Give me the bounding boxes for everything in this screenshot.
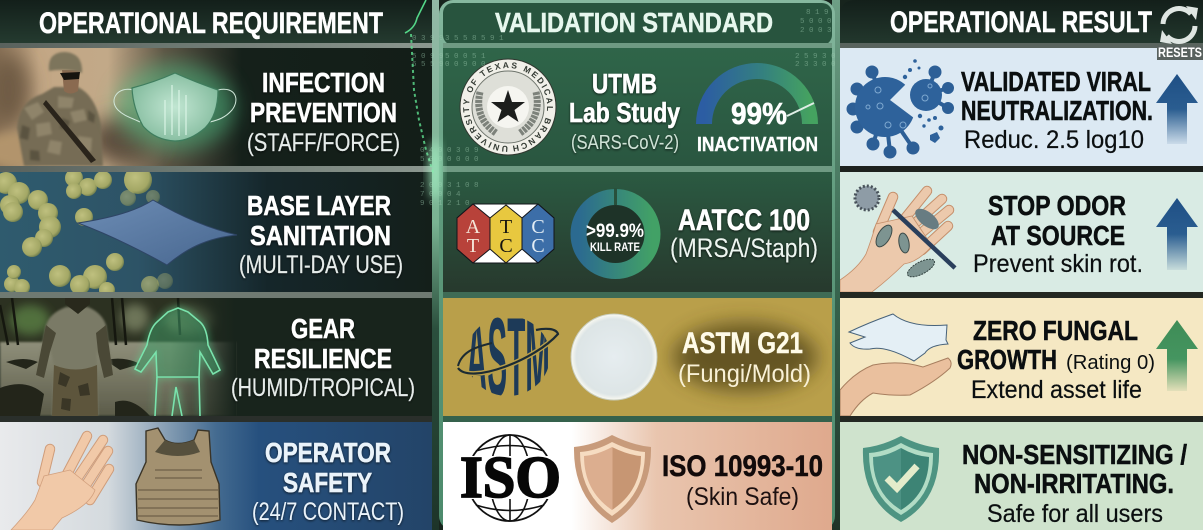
label: gear resilience: GEAR: [291, 313, 355, 344]
row: AATCC 100: [457, 188, 818, 271]
digital data streams: 2 5 9 3 0 0: [795, 53, 845, 61]
label: infection prevention: INFECTION: [262, 67, 385, 98]
row: ASTM G21: ASTM: [466, 295, 550, 420]
label: operator safety: OPERATOR: [265, 437, 391, 468]
icon: AATCC logo: C: [499, 235, 513, 257]
digital data streams: 3 5 5 8 5 9 1: [445, 35, 504, 43]
icon: plate carrier vest: [136, 428, 220, 525]
label: UTMB lab study: Lab Study: [569, 97, 680, 128]
icon: AATCC logo: T: [467, 235, 479, 257]
chart: kill rate donut: >99.9%: [586, 221, 644, 242]
label: AATCC 100: (MRSA/Staph): [670, 233, 818, 263]
icon: UTMB seal: UNIVERSITY OF TEXAS MEDICAL BRANCH: [463, 62, 553, 152]
icon: AATCC logo: C: [531, 235, 545, 257]
label: base layer sanitation: SANITATION: [250, 220, 391, 251]
row: viral neutralization: [840, 45, 1203, 166]
label: zero fungal growth: [957, 315, 1155, 404]
column: operational result: [840, 0, 1203, 530]
row: ISO 10993-10: [443, 422, 832, 530]
label: operator safety: SAFETY: [283, 467, 372, 498]
icon: AATCC logo: C: [531, 216, 545, 238]
label: stop odor at source: [973, 190, 1143, 278]
label: validated viral neutralization: [961, 66, 1153, 154]
photo: soldier in dust: [0, 52, 161, 168]
label: non-sensitizing non-irritating: [962, 439, 1187, 528]
label: stop odor at source: AT SOURCE: [991, 220, 1125, 251]
heading: operational requirement: OPERATIONAL REQUIREMENT: [39, 7, 383, 40]
row: zero fungal growth: [840, 298, 1203, 416]
icon: AATCC logo: A: [466, 216, 481, 238]
label: ASTM G21: [678, 327, 811, 388]
row: stop odor: [840, 172, 1203, 292]
label: gear resilience: (HUMID/TROPICAL): [231, 374, 415, 402]
arrow: up blue: [1156, 198, 1198, 270]
digital data streams: 5 0 0 0: [800, 18, 832, 26]
label: zero fungal growth: (Rating 0): [1066, 352, 1155, 374]
icon: hand holding cloth: [840, 314, 951, 416]
chart: kill rate donut: KILL RATE: [590, 242, 640, 254]
label: infection prevention: (STAFF/FORCE): [247, 129, 400, 157]
heading: validation standard: VALIDATION STANDARD: [495, 7, 773, 38]
digital data streams: [412, 9, 845, 208]
photo: uniform in jungle: [0, 298, 236, 416]
label: ISO 10993-10: (Skin Safe): [686, 483, 799, 511]
icon: hand with microbes: [840, 186, 955, 292]
digital data streams: 6 5 5 9: [412, 61, 444, 69]
chart: kill rate donut: [578, 188, 652, 271]
icon: skin-tone shield: [574, 435, 651, 523]
label: ISO 10993-10: [662, 450, 823, 511]
label: base layer sanitation: (MULTI-DAY USE): [239, 251, 403, 279]
digital data streams: 2 0 0 3: [800, 27, 832, 35]
row: infection prevention: [0, 48, 432, 168]
label: non-sensitizing non-irritating: NON-IRRITATING.: [974, 468, 1174, 499]
digital data streams: 9 0 1 2 1 0: [420, 200, 470, 208]
label: AATCC 100: [670, 204, 818, 263]
digital data streams: 0 4 0 0 3 0 9: [420, 147, 479, 155]
label: zero fungal growth: GROWTH: [957, 344, 1057, 375]
row: operator safety: [0, 422, 432, 530]
icon: check shield: [863, 436, 939, 522]
digital data streams: 2 3 3 0 0 0: [795, 61, 845, 69]
label: ASTM G21: (Fungi/Mold): [678, 360, 811, 388]
digital data streams: 5 0 0 5 1: [445, 53, 486, 61]
arrow: up blue: [1156, 74, 1198, 144]
icon: glowing uniform outline: [135, 308, 220, 416]
label: non-sensitizing non-irritating: Safe for all users: [987, 500, 1163, 528]
image: bacteria clusters: [0, 166, 173, 298]
label: stop odor at source: STOP ODOR: [988, 190, 1126, 221]
icon: AATCC logo: T: [500, 216, 512, 238]
digital data streams: 8 1 9: [806, 9, 829, 17]
column: operational requirement: [0, 0, 432, 530]
digital data streams: 7 0 0 0 4: [420, 191, 461, 199]
digital data streams: 0 3 9 9: [412, 35, 444, 43]
label: base layer sanitation: [239, 190, 403, 279]
row: base layer sanitation: [0, 172, 403, 292]
row: non-sensitizing: [840, 422, 1203, 530]
label: infection prevention: [247, 67, 400, 157]
label: gear resilience: [231, 313, 415, 402]
digital data streams: 0 0 9 0 0: [445, 61, 486, 69]
label: gear resilience: RESILIENCE: [254, 343, 392, 374]
label: validated viral neutralization: VALIDATED VIRAL: [961, 66, 1151, 97]
row: gear resilience: [0, 298, 432, 416]
label: UTMB lab study: UTMB: [592, 68, 657, 99]
label: base layer sanitation: BASE LAYER: [247, 190, 391, 221]
label: ASTM G21: ASTM G21: [682, 327, 803, 360]
arrow: up green: [1156, 320, 1198, 391]
green data glow line: [405, 0, 441, 200]
chart: 99% gauge: 99%: [731, 96, 787, 131]
digital data streams: 5 0 9 9: [412, 53, 444, 61]
label: AATCC 100: AATCC 100: [678, 204, 810, 237]
icon: glowing face mask: [114, 63, 236, 151]
label: UTMB lab study: [569, 68, 680, 154]
icon: resets arrows: [1160, 6, 1198, 44]
label: stop odor at source: Prevent skin rot.: [973, 250, 1143, 278]
label: zero fungal growth: ZERO FUNGAL: [973, 315, 1138, 346]
icon: fragmenting virus: [848, 59, 952, 157]
icon: ASTM logo: [457, 318, 560, 396]
digital data streams: 5 0 0 0 0 0 0: [420, 156, 479, 164]
label: ISO 10993-10: ISO 10993-10: [662, 450, 823, 483]
chart: 99% gauge: [697, 71, 818, 156]
icon: petri dish: [571, 314, 657, 400]
label: UTMB lab study: (SARS-CoV-2): [571, 132, 679, 154]
icon: AATCC logo: [457, 204, 554, 263]
label: operator safety: [252, 437, 404, 526]
chart: 99% gauge: INACTIVATION: [697, 134, 818, 156]
icon: fabric sheet: [78, 200, 237, 265]
label: operator safety: (24/7 CONTACT): [252, 498, 404, 526]
label: validated viral neutralization: Reduc. 2.5 log10: [964, 126, 1144, 154]
icon: open hand: [11, 436, 109, 530]
digital data streams: 2 0 0 3 1 0 8: [420, 182, 479, 190]
row: UTMB lab study: [460, 58, 818, 156]
label: infection prevention: PREVENTION: [250, 97, 397, 128]
icon: ISO globe logo: ISO: [460, 444, 561, 510]
label: zero fungal growth: Extend asset life: [971, 376, 1142, 404]
column: validation standard: [439, 0, 835, 530]
